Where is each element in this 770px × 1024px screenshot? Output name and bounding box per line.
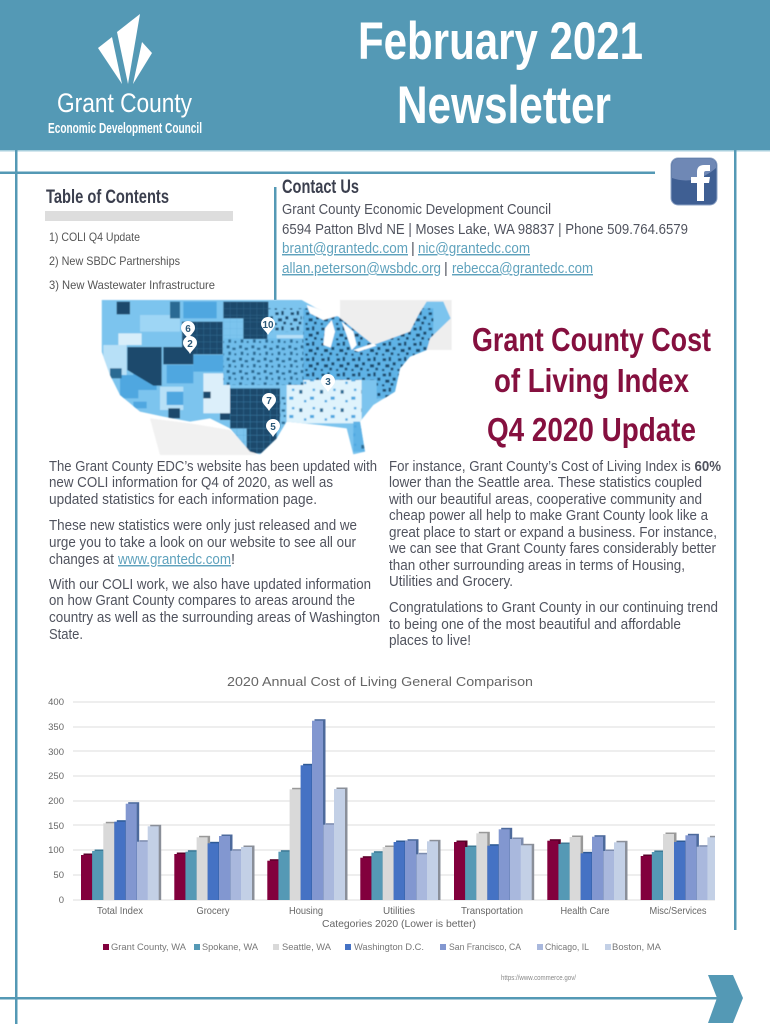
bars: Housing bbox=[267, 719, 348, 900]
map pin: 5 bbox=[266, 419, 280, 437]
category labels: Utilities bbox=[383, 905, 415, 917]
chart gridlines and y axis labels: 350 bbox=[48, 722, 64, 733]
text block: right column bbox=[388, 459, 721, 649]
heading: Grant County Cost of Living Index Q4 2020 Update: of Living Index bbox=[494, 362, 690, 399]
text block: right column: places to live! bbox=[389, 633, 471, 649]
map pin: 10 bbox=[261, 317, 275, 335]
text block: left column: country as well as the surrounding areas of Washington bbox=[49, 610, 380, 626]
panel: contact us: nic@grantedc.com bbox=[418, 241, 530, 257]
legend: Boston, MA bbox=[612, 942, 662, 953]
text block: right column: For instance, Grant County’s Cost of Living Index is 60% bbox=[389, 459, 721, 475]
logo: Grant County Economic Development Council bbox=[48, 14, 202, 137]
text block: left column: www.grantedc.com bbox=[117, 552, 231, 568]
chart gridlines and y axis labels bbox=[48, 697, 715, 906]
text block: right column: we can see that Grant County fares considerably better bbox=[388, 541, 716, 557]
heading: Grant County Cost of Living Index Q4 2020 Update bbox=[472, 321, 711, 448]
bar chart: 2020 Annual Cost of Living General Comparison bbox=[48, 674, 721, 953]
map pin: 3: 3 bbox=[325, 377, 331, 388]
panel: contact us: brant@grantedc.com bbox=[282, 241, 408, 257]
panel: contact us: 6594 Patton Blvd NE | Moses Lake, WA 98837 | Phone 509.764.6579 bbox=[282, 222, 688, 238]
map pin: 3 bbox=[321, 374, 335, 392]
text block: left column bbox=[49, 459, 380, 643]
text block: right column: Congratulations to Grant County in our continuing trend bbox=[389, 600, 718, 616]
legend: Grant County, WA bbox=[111, 942, 187, 953]
title: February 2021 Newsletter: February 2021 bbox=[358, 12, 643, 71]
text block: left column: on how Grant County compares to areas around the bbox=[49, 593, 355, 609]
category labels bbox=[97, 905, 706, 917]
text block: left column: The Grant County EDC’s website has been updated with bbox=[49, 459, 377, 475]
text block: right column: with our beautiful areas, cooperative community and bbox=[388, 492, 702, 508]
map pin: 7 bbox=[262, 393, 276, 411]
frame line: top horizontal bbox=[0, 172, 655, 174]
chart gridlines and y axis labels: 200 bbox=[48, 796, 64, 807]
panel: contact us: Grant County Economic Development Council bbox=[282, 202, 551, 218]
source url: https://www.commerce.gov/ bbox=[501, 975, 576, 982]
icon: facebook bbox=[671, 158, 717, 205]
bars: Health Care bbox=[547, 835, 628, 900]
panel: table of contents bbox=[45, 187, 233, 292]
text block: right column: great place to start or expand a business. For instance, bbox=[389, 525, 717, 541]
arrow: next page chevron bbox=[708, 975, 743, 1023]
title: February 2021 Newsletter bbox=[358, 12, 643, 135]
map: cost of living choropleth of the United States bbox=[100, 298, 453, 457]
category labels: Housing bbox=[289, 905, 323, 917]
map pin: 6: 6 bbox=[185, 324, 191, 335]
panel: contact us bbox=[282, 177, 688, 277]
bars: Grocery bbox=[174, 834, 254, 900]
logo: Grant County Economic Development Council: Grant County bbox=[57, 88, 192, 118]
map pin: 10: 10 bbox=[262, 320, 274, 331]
axis title: Categories 2020 (Lower is better) bbox=[322, 918, 476, 930]
panel: table of contents: 2) New SBDC Partnerships bbox=[49, 254, 180, 268]
legend: Washington D.C. bbox=[354, 942, 424, 953]
category labels: Misc/Services bbox=[650, 905, 706, 917]
panel: contact us: | bbox=[444, 261, 448, 277]
chart gridlines and y axis labels: 100 bbox=[48, 845, 64, 856]
chart gridlines and y axis labels: 400 bbox=[48, 697, 64, 708]
text block: left column: ! bbox=[231, 552, 235, 568]
divider between contents and contact bbox=[274, 187, 276, 300]
text block: left column: changes at bbox=[49, 552, 114, 568]
bars: Total Index bbox=[81, 802, 161, 900]
panel: contact us: allan.peterson@wsbdc.org bbox=[282, 261, 441, 277]
footer line bbox=[0, 997, 720, 1000]
header banner bbox=[0, 0, 770, 152]
logo: Grant County Economic Development Council: Economic Development Council bbox=[48, 120, 202, 137]
text block: left column: urge you to take a look on our website to see all our bbox=[49, 535, 356, 551]
map pin: 6 bbox=[181, 321, 195, 339]
chart title: 2020 Annual Cost of Living General Comparison bbox=[227, 674, 533, 689]
legend: Seattle, WA bbox=[282, 942, 332, 953]
frame line: left vertical bbox=[15, 150, 18, 1024]
panel: table of contents: 1) COLI Q4 Update bbox=[49, 230, 140, 244]
bars: Misc/Services bbox=[641, 832, 721, 900]
text block: right column: Utilities and Grocery. bbox=[389, 574, 513, 590]
title: February 2021 Newsletter: Newsletter bbox=[397, 76, 611, 135]
chart gridlines and y axis labels: 300 bbox=[48, 747, 64, 758]
heading: Grant County Cost of Living Index Q4 2020 Update: Q4 2020 Update bbox=[487, 411, 696, 448]
category labels: Health Care bbox=[560, 905, 610, 917]
chart gridlines and y axis labels: 250 bbox=[48, 771, 64, 782]
text block: left column: These new statistics were only just released and we bbox=[49, 518, 357, 534]
panel: table of contents: 3) New Wastewater Infrastructure bbox=[49, 278, 215, 292]
bars: Transportation bbox=[454, 828, 534, 900]
map pin: 7: 7 bbox=[266, 396, 272, 407]
panel: contact us: Contact Us bbox=[282, 177, 359, 198]
map pin: 2: 2 bbox=[187, 339, 193, 350]
category labels: Total Index bbox=[97, 905, 144, 917]
text block: left column: With our COLI work, we also have updated information bbox=[49, 577, 371, 593]
legend: Chicago, IL bbox=[545, 942, 589, 953]
category labels: Grocery bbox=[196, 905, 230, 917]
heading: Grant County Cost of Living Index Q4 2020 Update: Grant County Cost bbox=[472, 321, 711, 358]
bars: Utilities bbox=[360, 839, 440, 900]
text block: right column: than other surrounding areas in terms of Housing, bbox=[389, 558, 685, 574]
text block: left column: updated statistics for each information page. bbox=[49, 492, 317, 508]
legend bbox=[103, 942, 662, 953]
text block: right column: to being one of the most beautiful and affordable bbox=[389, 617, 681, 633]
chart gridlines and y axis labels: 50 bbox=[53, 870, 64, 881]
text block: left column: new COLI information for Q4 of 2020, as well as bbox=[49, 475, 333, 491]
panel: table of contents: Table of Contents bbox=[46, 187, 169, 208]
frame line: right vertical bbox=[734, 150, 736, 930]
legend: Spokane, WA bbox=[202, 942, 259, 953]
panel: contact us: rebecca@grantedc.com bbox=[452, 261, 593, 277]
text block: right column: lower than the Seattle area. These statistics coupled bbox=[389, 475, 702, 491]
panel: contact us: | bbox=[411, 241, 415, 257]
map pin: 2 bbox=[183, 336, 197, 354]
category labels: Transportation bbox=[461, 905, 523, 917]
text block: right column: cheap power all help to make Grant County look like a bbox=[389, 508, 709, 524]
map pin: 5: 5 bbox=[270, 422, 276, 433]
chart gridlines and y axis labels: 150 bbox=[48, 821, 64, 832]
chart gridlines and y axis labels: 0 bbox=[59, 895, 64, 906]
text block: left column: State. bbox=[49, 627, 83, 643]
legend: San Francisco, CA bbox=[449, 942, 522, 953]
